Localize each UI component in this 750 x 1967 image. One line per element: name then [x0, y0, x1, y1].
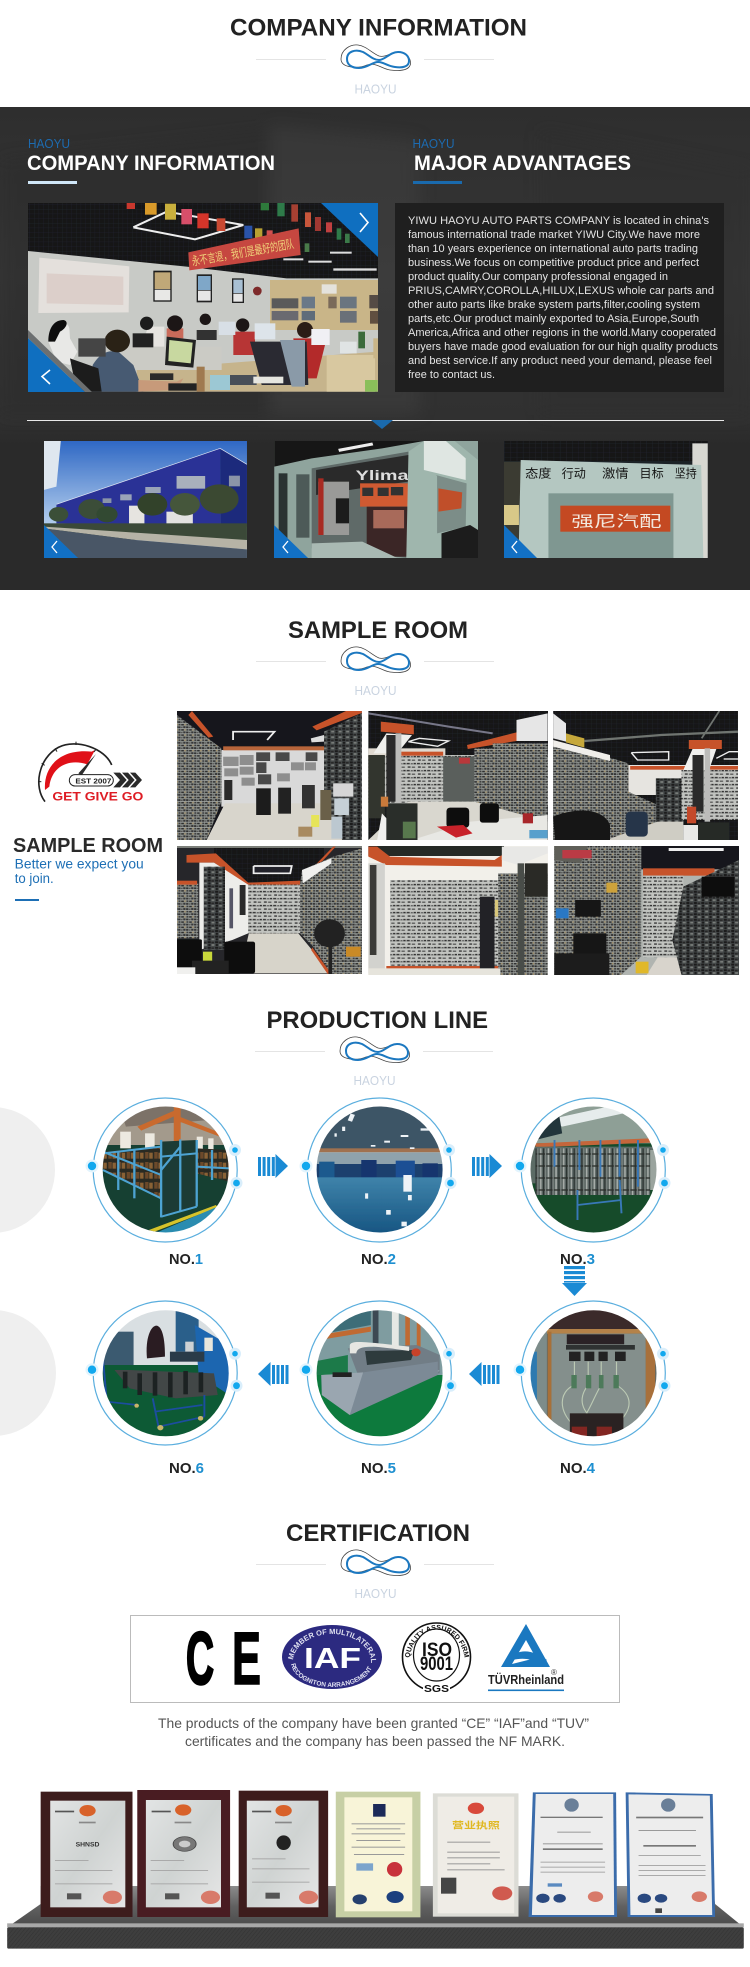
wall chart [38, 258, 129, 313]
photo: sample room 5 [368, 846, 548, 975]
thumbnail: company motto wall: 坚持 [675, 467, 697, 480]
step NO.4 [514, 1301, 670, 1477]
thumbnail: company motto wall: 强尼汽配 [571, 513, 662, 530]
icon: CE mark: C [186, 1617, 214, 1700]
title: PRODUCTION LINE [266, 1007, 488, 1034]
banner [188, 228, 301, 270]
icon: ISO 9001 seal [402, 1622, 472, 1695]
thumbnail: company motto wall: 激情 [602, 467, 629, 480]
arrow [472, 1154, 502, 1178]
sample room caption: SAMPLE ROOM [13, 834, 163, 857]
right heading: HAOYU [412, 137, 454, 151]
sample room caption: to join. [15, 871, 54, 886]
subtitle: HAOYU [354, 82, 396, 96]
icon: ISO 9001 seal: SGS [424, 1684, 449, 1695]
thumbnail: factory building [44, 441, 247, 558]
photo: control cabinet [528, 1308, 662, 1438]
photo: sample room 4 [177, 845, 362, 974]
step NO.1 [86, 1098, 242, 1268]
thumbnail: company motto wall: 行动 [562, 467, 586, 480]
text box: company description: famous international trade market YIWU City.We have more [408, 229, 700, 241]
banner: 永不言退，我们是最好的团队 [191, 236, 295, 269]
photo: factory floor [316, 1106, 443, 1232]
icon: ISO 9001 seal: ISO [422, 1640, 452, 1661]
text box: company description: free to contact us. [408, 369, 495, 381]
certificate 2: trademark frame [137, 1790, 230, 1917]
icon: TUV Rheinland: TÜVRheinland [488, 1672, 564, 1687]
thumbnail: company motto wall: 态度 [525, 467, 552, 480]
text box: company description: product quality.Our company professional engaged in [408, 271, 668, 283]
text box: company description: parts,etc.Our product mainly exported to Asia,Europe,South [408, 313, 699, 325]
subtitle: HAOYU [354, 1074, 396, 1088]
certification description [158, 1715, 589, 1749]
title: COMPANY INFORMATION [230, 15, 527, 42]
bookshelf [270, 280, 378, 330]
step NO.3 [514, 1098, 670, 1268]
thumbnail: showroom entrance [274, 441, 478, 558]
step NO.5 [300, 1301, 456, 1477]
text box: company description: than 10 years experience on international auto parts trading [408, 243, 698, 255]
arrow [258, 1362, 288, 1386]
arrow [562, 1266, 587, 1296]
photo: sample room 6 [554, 846, 739, 975]
text box: company description [395, 203, 724, 392]
logo: get give go speedometer [38, 742, 144, 804]
framed pictures [153, 271, 172, 302]
text box: company description: business.We focus on competitive product price and perfect [408, 257, 699, 269]
ring [86, 1098, 242, 1242]
section heading: production line [255, 1007, 493, 1088]
text box: company description: America,Africa and other regions in the world.Many cooperated [408, 327, 716, 339]
photo: hanging rack line [528, 1103, 662, 1235]
certificate 6: ISO blue [529, 1792, 617, 1917]
corner arrow [504, 525, 537, 558]
label: NO.3 [560, 1251, 595, 1268]
icon: TUV Rheinland: ® [551, 1668, 557, 1677]
office photo [28, 203, 378, 392]
photo: sample room 3 [553, 711, 738, 840]
ring [514, 1098, 670, 1242]
thumbnail: company motto wall [504, 441, 708, 558]
photo: sample room 2 [368, 711, 548, 840]
photo: oven line [313, 1308, 447, 1440]
icon: ISO 9001 seal: QUALITY ASSURED FIRM [405, 1624, 470, 1658]
text box: company description: YIWU HAOYU AUTO PARTS COMPANY is located in china's [408, 215, 710, 227]
ring [300, 1098, 456, 1242]
text box: company description: other auto parts like brake system parts,filter,cooling system [408, 299, 700, 311]
icon: ISO 9001 seal: 9001 [420, 1654, 453, 1675]
arrow [258, 1154, 288, 1178]
subtitle: HAOYU [354, 684, 396, 698]
left heading: COMPANY INFORMATION [27, 152, 275, 175]
sample room caption [13, 834, 163, 901]
step NO.6 [86, 1301, 242, 1477]
certification description: certificates and the company has been passed the NF MARK. [185, 1733, 565, 1749]
text box: company description: buyers have made good evaluation for our high quality products [408, 341, 718, 353]
corner: previous arrow [28, 330, 92, 392]
ring [514, 1301, 670, 1445]
label: NO.1 [169, 1251, 203, 1268]
arrow [469, 1362, 500, 1386]
step NO.2 [300, 1098, 456, 1268]
building silhouette backdrop [0, 125, 750, 415]
certificate 5: business license: 营业执照 [452, 1819, 500, 1831]
ring [86, 1301, 242, 1445]
divider with logo [255, 1037, 493, 1062]
certificate 7: ISO blue [626, 1792, 715, 1917]
section heading: sample room [256, 617, 494, 698]
decorative side circles [0, 1107, 56, 1436]
label: NO.6 [169, 1460, 204, 1477]
icon: IAF badge: RECOGNITON ARRANGEMENT [291, 1663, 372, 1687]
thumbnail: showroom entrance: Ylima [356, 468, 410, 483]
shelf [7, 1886, 744, 1949]
photo: storage racks [99, 1103, 233, 1235]
photo: sample room 1 [177, 711, 362, 840]
section heading: company information [230, 15, 527, 96]
divider with logo [256, 1550, 494, 1575]
right heading: MAJOR ADVANTAGES [414, 152, 631, 175]
ring [300, 1301, 456, 1445]
certificate 3: trademark frame [239, 1791, 328, 1917]
label: NO.4 [560, 1460, 596, 1477]
text box: company description: and best service.If any product need your demand, please feel [408, 355, 712, 367]
divider with logo [256, 647, 494, 672]
left heading [27, 137, 275, 184]
corner arrow [44, 525, 78, 558]
label: NO.5 [361, 1460, 396, 1477]
logo: get give go speedometer: GET GIVE GO [52, 790, 144, 804]
icon: CE mark: E [232, 1617, 261, 1700]
sample room caption: Better we expect you [15, 857, 144, 872]
icon: IAF badge: IAF [304, 1643, 361, 1675]
photo: parts on carts [99, 1308, 233, 1440]
section heading: certification [256, 1520, 494, 1601]
icon: IAF badge [282, 1625, 382, 1689]
subtitle: HAOYU [354, 1587, 396, 1601]
panel: certification marks [130, 1615, 620, 1703]
certificate 1: trademark frame [41, 1792, 132, 1917]
divider with marker [27, 420, 724, 429]
flags [127, 203, 350, 252]
title: CERTIFICATION [286, 1520, 470, 1547]
label: NO.2 [361, 1251, 396, 1268]
logo: get give go speedometer: EST 2007 [75, 778, 111, 785]
corner: next arrow [321, 203, 378, 257]
certificate display shelf [7, 1790, 744, 1949]
left heading: HAOYU [28, 137, 70, 151]
text box: company description: PRIUS,CAMRY,COROLLA,HILUX,LEXUS whole car parts and [408, 285, 714, 297]
certificate 5: business license [433, 1793, 518, 1917]
thumbnail: company motto wall: 目标 [640, 467, 664, 480]
right heading [412, 137, 631, 184]
title: SAMPLE ROOM [288, 617, 468, 644]
panel: dark company information [0, 107, 750, 590]
certification description: The products of the company have been granted “CE” “IAF”and “TUV” [158, 1715, 589, 1731]
certificate 4: accreditation [336, 1792, 420, 1917]
icon: TUV Rheinland [488, 1624, 564, 1691]
divider with logo [256, 45, 494, 70]
desks and staff [137, 352, 378, 392]
icon: IAF badge: MEMBER OF MULTILATERAL [288, 1628, 376, 1663]
corner arrow [274, 525, 308, 558]
certificate 1: trademark frame: SHNSD [76, 1841, 100, 1848]
